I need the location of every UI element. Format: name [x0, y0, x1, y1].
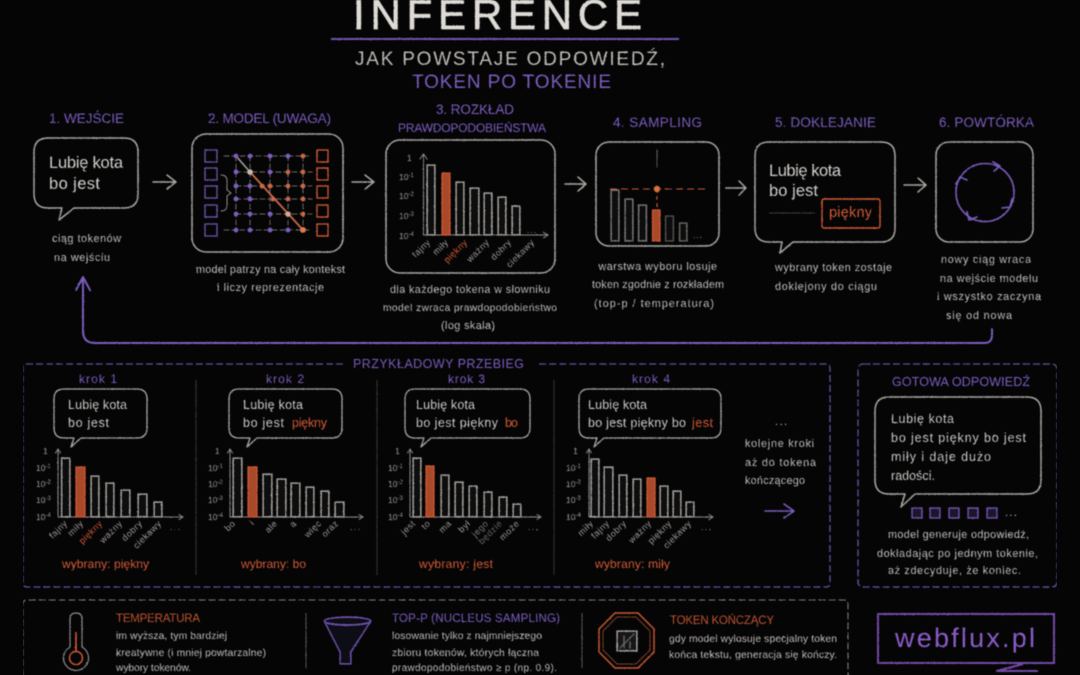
log-scale bar chart [399, 153, 548, 270]
step example 1: -1 [45, 464, 51, 470]
step example 2: 10 [208, 512, 217, 522]
step example 2: krok 2 [266, 372, 304, 386]
step 3: probability distribution: dla każdego tokena w słowniku [390, 284, 550, 296]
step 6: repeat: nowy ciąg wraca [941, 254, 1031, 266]
step example 1: wybrany: piękny [61, 557, 149, 571]
step example 2: ale [263, 518, 279, 535]
step 1: input: Lubię kota [49, 154, 124, 172]
step example 3: może [497, 518, 521, 542]
end token text: TOKEN KOŃCZĄCY [670, 614, 774, 627]
step 5: append token: piękny [829, 205, 873, 221]
temperature text: TEMPERATURA [116, 613, 200, 625]
return arrow [76, 277, 992, 343]
step example 2: bo jest [243, 416, 285, 430]
step 1: input: ciąg tokenów [52, 233, 121, 245]
log-scale bar chart: ważny [464, 237, 491, 265]
logo: webflux.pl: webflux.pl [894, 623, 1035, 653]
top-p text: prawdopodobieństwo ≥ p (np. 0.9). [392, 663, 557, 674]
log-scale bar chart: 10 [399, 172, 408, 182]
step example 3: bo jest piękny [416, 416, 499, 430]
step example 1: Lubię kota [68, 398, 127, 412]
step example 2: 10 [208, 495, 217, 505]
step 2: model attention: 2. MODEL (UWAGA) [208, 111, 331, 126]
step example 2: -1 [217, 464, 223, 470]
step example 3: jest [398, 518, 417, 537]
panel: glossary [23, 600, 848, 675]
panel: final answer: ... [1005, 507, 1018, 519]
step example 1: ... [170, 522, 182, 532]
step example 3: -4 [397, 513, 403, 519]
icon: stop octagon [599, 613, 654, 668]
step 2: model attention: model patrzy na cały kontekst [196, 264, 345, 276]
step example 2: 10 [208, 479, 217, 489]
subtitle: JAK POWSTAJE ODPOWIEDŹ, [355, 49, 665, 70]
step example 2: Lubię kota [243, 398, 303, 412]
panel: final answer: Lubię kota [891, 412, 954, 426]
step example 3: -3 [397, 496, 403, 502]
step 3: probability distribution: (log skala) [441, 320, 495, 332]
step example 1: -2 [45, 480, 51, 486]
step example 4: krok 4 [632, 372, 670, 386]
step example 4: ... [701, 522, 713, 532]
step example 2: więc [301, 518, 323, 540]
arrow 5 to 6 [904, 178, 926, 192]
step 3: probability distribution: PRAWDOPODOBIEŃSTWA [398, 120, 546, 135]
end token text: gdy model wylosuje specjalny token [669, 634, 837, 645]
input token squares [205, 150, 217, 236]
step 3: probability distribution: model zwraca prawdopodobieństwo [383, 303, 557, 314]
step example 3: 10 [388, 512, 397, 522]
step example 4: 1 [573, 446, 578, 456]
step 4: sampling: (top-p / temperatura) [594, 298, 714, 310]
step 1: input: 1. WEJŚCIE [49, 111, 124, 126]
step 5: append token: wybrany token zostaje [774, 262, 892, 274]
log-scale bar chart: fajny [410, 237, 432, 260]
log-scale bar chart: piękny [442, 237, 469, 265]
log-scale bar chart: 1 [407, 153, 412, 163]
bracket [221, 175, 231, 211]
icon: funnel [324, 617, 371, 664]
step 4: sampling: token zgodnie z rozkładem [592, 279, 724, 291]
step example 2: ... [350, 522, 362, 532]
step example 1: ciekawy [131, 518, 163, 551]
step 1: input: bo jest [49, 175, 100, 193]
step 4: sampling: warstwa wyboru losuje [598, 261, 717, 273]
step example 1: 10 [36, 512, 45, 522]
temperature text: wybory tokenów. [115, 663, 191, 674]
panel: example run [23, 357, 830, 587]
step example 2: wybrany: bo [240, 557, 306, 571]
step example 3: ma [437, 518, 453, 535]
step example 3: to [419, 518, 432, 531]
temperature text [115, 613, 266, 674]
title underline [331, 38, 679, 40]
step example 4 [566, 372, 721, 571]
step example 2: oraz [320, 518, 340, 539]
step example 4: -3 [575, 496, 581, 502]
step example 4: jest [691, 416, 714, 430]
logo: webflux.pl [878, 614, 1054, 671]
step example 2: bo [223, 518, 237, 533]
top-p text: losowanie tylko z najmniejszego [392, 631, 542, 642]
log-scale bar chart: dobry [489, 237, 513, 262]
top-p text [392, 613, 560, 674]
step example 3: bo [505, 416, 518, 430]
step 2: model attention [192, 111, 345, 294]
step 5: append token: bo jest [769, 182, 818, 200]
arrow 1 to 2 [153, 175, 176, 189]
step example 3: 1 [395, 446, 400, 456]
step 6: repeat: się od nowa [946, 310, 1012, 322]
top-p text: zbioru tokenów, których łączna [392, 648, 539, 659]
step example 1: 1 [43, 446, 48, 456]
panel: final answer: radości. [891, 469, 935, 483]
panel: final answer: model generuje odpowiedź, [888, 529, 1029, 541]
step example 3: -1 [397, 464, 403, 470]
step example 4: -4 [575, 513, 581, 519]
step example 4: -1 [575, 464, 581, 470]
step example 2: a [287, 518, 298, 529]
step 1: input [34, 111, 138, 264]
step 6: repeat: na wejście modelu [940, 273, 1038, 285]
step example 3: Lubię kota [416, 398, 475, 412]
step example 4: fajny [589, 518, 611, 541]
step example 3: 10 [388, 463, 397, 473]
step example 1: 10 [36, 479, 45, 489]
log-scale bar chart: -3 [408, 212, 414, 218]
panel: final answer: aż zdecyduje, że koniec. [888, 565, 1021, 577]
step example 4: ciekawy [661, 518, 693, 551]
log-scale bar chart: ... [527, 225, 537, 235]
token squares [912, 508, 997, 518]
icon: cycle arrows [956, 162, 1014, 222]
log-scale bar chart: 10 [399, 231, 408, 241]
step example 2: piękny [292, 416, 328, 430]
step 6: repeat [936, 115, 1041, 322]
step example 4: piękny [646, 518, 673, 546]
step example 1: fajny [47, 518, 69, 541]
arrow 2 to 3 [352, 175, 374, 189]
output token squares [317, 150, 328, 236]
step example 4: dobry [604, 518, 628, 543]
log-scale bar chart: 10 [399, 211, 408, 221]
step example 2: i [248, 518, 256, 527]
panel title: PRZYKŁADOWY PRZEBIEG [353, 357, 524, 371]
step example 4: wybrany: miły [594, 557, 670, 571]
step example 4: miły [576, 518, 595, 538]
log-scale bar chart: 10 [399, 191, 408, 201]
step example 4: 10 [566, 479, 575, 489]
panel: final answer: dokładając po jednym tokenie, [877, 548, 1038, 560]
step example 2 [208, 372, 363, 571]
subtitle [355, 49, 665, 93]
step example 3: ... [528, 522, 540, 532]
temperature text: kreatywne (i mniej powtarzalne) [116, 648, 266, 659]
step example 2: -3 [217, 496, 223, 502]
arrow 3 to 4 [565, 177, 586, 191]
log-scale bar chart: -2 [408, 192, 414, 198]
step example 1: -3 [45, 496, 51, 502]
next steps note [745, 416, 816, 518]
step example 1: ważny [97, 518, 124, 546]
end token text: końca tekstu, generacja się kończy. [669, 650, 837, 661]
step example 1: bo jest [68, 416, 110, 430]
log-scale bar chart: -1 [408, 173, 414, 179]
step 4: sampling [592, 115, 724, 310]
temperature text: im wyższa, tym bardziej [116, 631, 227, 642]
arrow 4 to 5 [726, 181, 746, 195]
step example 1: miły [66, 518, 85, 538]
step 4: sampling: ... [693, 230, 703, 240]
step example 4: bo jest piękny bo [588, 416, 686, 430]
step example 3: 10 [388, 495, 397, 505]
log-scale bar chart: -4 [408, 232, 414, 238]
log-scale bar chart: miły [431, 237, 450, 257]
step example 2: -4 [217, 513, 223, 519]
next steps note: kolejne kroki [745, 438, 814, 450]
step example 1 [36, 372, 183, 571]
step 5: append token [755, 115, 895, 293]
step example 3: był [456, 518, 472, 535]
step 2: model attention: i liczy reprezentacje [217, 282, 324, 294]
step 3: probability distribution [383, 102, 557, 332]
panel: final answer: miły i daje dużo [891, 450, 991, 464]
step example 1: dobry [120, 518, 144, 543]
panel: final answer [858, 364, 1057, 587]
step 3: probability distribution: 3. ROZKŁAD [436, 102, 514, 117]
step example 2: 1 [215, 446, 220, 456]
step 5: append token: 5. DOKLEJANIE [775, 115, 876, 130]
subtitle: TOKEN PO TOKENIE [412, 72, 611, 93]
end token text [669, 614, 837, 661]
step example 2: 10 [208, 463, 217, 473]
panel: final answer: bo jest piękny bo jest [891, 431, 1027, 445]
step example 4: 10 [566, 512, 575, 522]
next steps note: ... [775, 416, 788, 428]
step 5: append token: Lubię kota [769, 162, 842, 180]
step 6: repeat: i wszystko zaczyna [937, 291, 1041, 303]
step example 4: -2 [575, 480, 581, 486]
step example 3: 10 [388, 479, 397, 489]
step example 1: piękny [77, 518, 104, 546]
step example 3 [388, 372, 541, 571]
step example 1: 10 [36, 463, 45, 473]
step example 3: wybrany: jest [418, 557, 494, 571]
step 5: append token: doklejony do ciągu [775, 281, 877, 293]
step example 4: ważny [626, 518, 653, 546]
step example 4: 10 [566, 495, 575, 505]
attention grid [224, 154, 312, 233]
step example 1: 10 [36, 495, 45, 505]
next steps note: aż do tokena [745, 457, 816, 469]
step example 3: jego [469, 518, 490, 540]
step example 2: -2 [217, 480, 223, 486]
step example 3: krok 3 [448, 372, 485, 386]
top-p text: TOP-P (NUCLEUS SAMPLING) [392, 613, 560, 625]
step example 1: krok 1 [79, 372, 117, 386]
step 1: input: na wejściu [54, 252, 110, 264]
log-scale bar chart: ciekawy [504, 237, 536, 270]
step example 3: -2 [397, 480, 403, 486]
icon: thermometer [63, 613, 88, 670]
panel: final answer: GOTOWA ODPOWIEDŹ [892, 374, 1030, 389]
step example 1: -4 [45, 513, 51, 519]
step example 4: 10 [566, 463, 575, 473]
next steps note: kończącego [745, 475, 805, 487]
step example 3: będzie [476, 518, 504, 546]
step 4: sampling: 4. SAMPLING [613, 115, 702, 130]
step 6: repeat: 6. POWTÓRKA [939, 115, 1034, 130]
step example 4: Lubię kota [588, 398, 647, 412]
